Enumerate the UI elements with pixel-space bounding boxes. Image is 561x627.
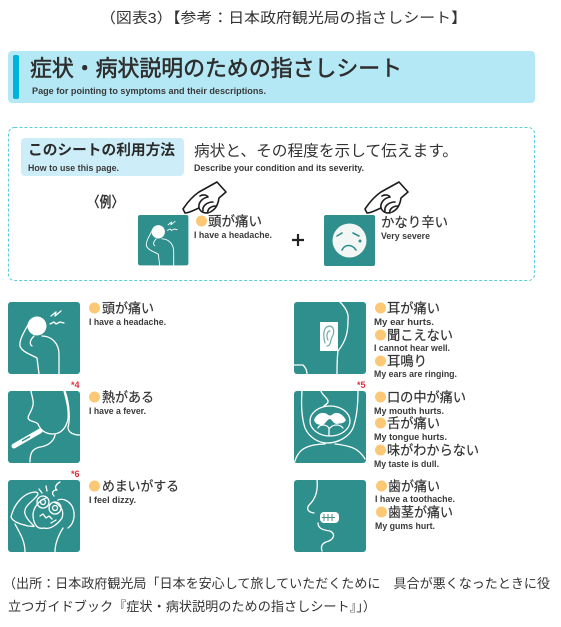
how to use label: このシートの利用方法 xyxy=(28,141,176,159)
symptom text: tooth: 歯が痛い xyxy=(388,478,440,494)
severity example text: かなり辛い xyxy=(381,215,448,230)
icon: ear xyxy=(294,302,366,374)
symptom text: mouth: My taste is dull. xyxy=(374,459,439,470)
plus sign xyxy=(292,234,304,246)
icon: pointing hand 2 xyxy=(365,182,408,213)
symptom text: ear: 耳鳴り xyxy=(387,354,427,369)
symptom example text xyxy=(194,213,272,241)
footnote mark 4: *4 xyxy=(71,380,80,390)
footnote mark 5: *5 xyxy=(357,380,366,390)
symptom text: fever xyxy=(89,390,154,417)
symptom text: ear: I cannot hear well. xyxy=(374,343,450,354)
symptom text: mouth: 口の中が痛い xyxy=(387,389,466,405)
symptom text: ear xyxy=(374,300,457,380)
example label: 〈例〉 xyxy=(88,194,123,211)
symptom text: ear: 耳が痛い xyxy=(387,300,440,316)
symptom text: mouth: My tongue hurts. xyxy=(374,432,447,443)
severity example text xyxy=(381,215,448,242)
symptom text: ear: My ear hurts. xyxy=(374,317,434,328)
symptom text: headache: 頭が痛い xyxy=(102,300,154,316)
icon: fever xyxy=(8,391,80,463)
symptom text: tooth: I have a toothache. xyxy=(375,494,455,505)
panel: title banner xyxy=(8,51,535,103)
symptom text: mouth: 味がわからない xyxy=(387,443,479,458)
panel: title banner: Page for pointing to symptoms and their descriptions. xyxy=(32,86,266,96)
icon: headache example xyxy=(138,215,188,265)
source caption: 立つガイドブック『症状・病状説明のための指さしシート』」） xyxy=(8,599,376,614)
symptom text: headache xyxy=(89,300,166,328)
symptom text: tooth: 歯茎が痛い xyxy=(388,504,453,520)
panel: how to use xyxy=(8,128,534,280)
icon: headache xyxy=(8,302,80,374)
symptom text: dizzy: I feel dizzy. xyxy=(89,495,136,506)
how to use label: How to use this page. xyxy=(28,163,119,174)
symptom text: ear: My ears are ringing. xyxy=(374,369,457,380)
symptom text: mouth xyxy=(374,389,479,470)
symptom text: headache: I have a headache. xyxy=(89,317,166,328)
panel: title banner: 症状・病状説明のための指さしシート xyxy=(30,56,402,81)
source caption xyxy=(3,576,550,614)
symptom text: mouth: 舌が痛い xyxy=(387,415,440,431)
icon: dizzy xyxy=(8,480,80,552)
symptom example text: I have a headache. xyxy=(194,230,272,241)
icon: mouth xyxy=(294,391,366,463)
symptom text: tooth xyxy=(375,478,455,532)
icon: pointing hand 1 xyxy=(183,182,226,213)
icon: severity face xyxy=(324,215,375,266)
icon: tooth xyxy=(294,480,366,552)
instruction text: 病状と、その程度を示して伝えます。 xyxy=(194,142,458,160)
instruction text: Describe your condition and its severity. xyxy=(194,163,364,174)
instruction text xyxy=(194,142,458,174)
symptom text: ear: 聞こえない xyxy=(387,328,453,343)
how to use label xyxy=(21,138,184,176)
footnote mark 6: *6 xyxy=(71,469,80,479)
symptom text: dizzy: めまいがする xyxy=(102,479,179,494)
top caption: （図表3）【参考：日本政府観光局の指さしシート】 xyxy=(100,10,467,27)
symptom text: dizzy xyxy=(89,479,179,506)
symptom example text: 頭が痛い xyxy=(208,213,262,229)
symptom text: fever: 熱がある xyxy=(102,390,154,405)
symptom text: tooth: My gums hurt. xyxy=(375,521,435,532)
source caption: （出所：日本政府観光局「日本を安心して旅していただくために 具合が悪くなったときに役 xyxy=(3,576,550,591)
severity example text: Very severe xyxy=(381,231,430,242)
symptom text: mouth: My mouth hurts. xyxy=(374,406,444,417)
symptom text: fever: I have a fever. xyxy=(89,406,146,417)
